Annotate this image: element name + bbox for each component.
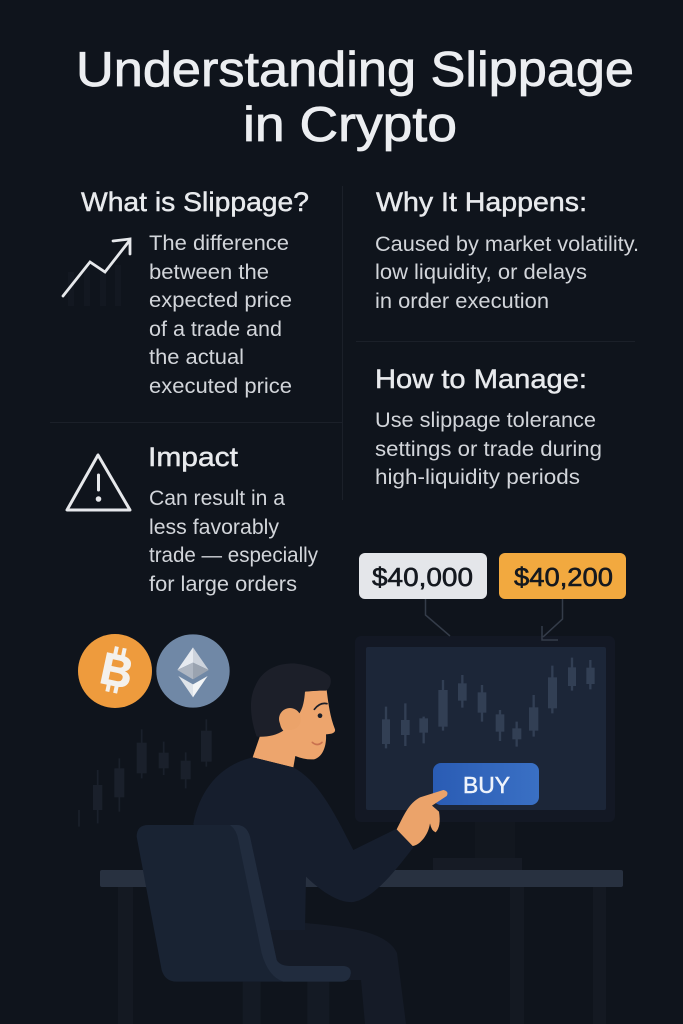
button: buy: BUY xyxy=(463,772,510,798)
panel: why it happens xyxy=(375,187,639,313)
text: causes of slippage: Caused by market volatility. xyxy=(375,232,639,256)
illustration: pointing hand xyxy=(397,790,447,846)
hair xyxy=(251,663,331,737)
text: causes of slippage xyxy=(375,232,639,313)
panel: impact xyxy=(67,442,318,596)
illustration: background candlesticks xyxy=(79,719,212,827)
arrow: expected price connector xyxy=(426,599,450,636)
icon: bitcoin coin xyxy=(78,634,152,708)
illustration: desk xyxy=(100,870,623,1024)
text: slippage definition: of a trade and xyxy=(149,317,282,341)
text: management tips xyxy=(375,408,602,489)
icon: rising price chart arrow xyxy=(63,239,130,306)
text: management tips: settings or trade during xyxy=(375,437,602,461)
torso and arm xyxy=(193,757,413,930)
illustration: trader at desk xyxy=(137,663,413,1024)
chair xyxy=(137,825,351,982)
price tag: expected $40,000: $40,000 xyxy=(372,562,473,592)
text: management tips: high-liquidity periods xyxy=(375,465,580,489)
title: in Crypto xyxy=(243,98,457,152)
skin: face and neck xyxy=(253,690,335,767)
title: Understanding Slippage xyxy=(76,43,634,97)
text: management tips: Use slippage tolerance xyxy=(375,408,596,432)
heading: impact: Impact xyxy=(148,442,239,472)
text: slippage definition: between the xyxy=(149,260,269,284)
eye xyxy=(318,713,322,718)
panel: what is slippage xyxy=(63,187,309,398)
title xyxy=(76,43,634,152)
price tag: expected $40,000 xyxy=(359,553,487,599)
legs xyxy=(247,920,406,1024)
heading: why it happens: Why It Happens: xyxy=(376,187,587,217)
text: impact description: for large orders xyxy=(149,572,297,596)
chair edge highlight xyxy=(230,825,351,982)
text: impact description: less favorably xyxy=(149,515,279,539)
text: slippage definition: expected price xyxy=(149,288,292,312)
heading: what is slippage: What is Slippage? xyxy=(81,187,309,217)
text: causes of slippage: low liquidity, or delays xyxy=(375,260,587,284)
text: slippage definition: the actual xyxy=(149,345,244,369)
mouth xyxy=(312,742,322,744)
price tag: executed $40,200 xyxy=(499,553,626,599)
icon: ethereum coin xyxy=(156,634,230,708)
chart: monitor candlesticks xyxy=(382,658,595,748)
text: impact description: Can result in a xyxy=(149,486,285,510)
icon: warning triangle xyxy=(67,455,130,510)
text: slippage definition: executed price xyxy=(149,374,292,398)
icon: bitcoin coin: B xyxy=(96,642,138,699)
panel: how to manage xyxy=(375,364,602,489)
text: causes of slippage: in order execution xyxy=(375,289,549,313)
text: impact description xyxy=(149,486,318,596)
heading: how to manage: How to Manage: xyxy=(375,364,587,394)
text: impact description: trade — especially xyxy=(149,543,318,567)
arrow: executed price connector xyxy=(542,599,562,640)
text: slippage definition: The difference xyxy=(149,231,289,255)
eyebrow xyxy=(314,703,327,709)
illustration: monitor xyxy=(355,636,615,870)
ear xyxy=(279,708,301,730)
text: slippage definition xyxy=(149,231,292,398)
button: buy xyxy=(433,763,539,805)
price tag: executed $40,200: $40,200 xyxy=(514,562,613,592)
